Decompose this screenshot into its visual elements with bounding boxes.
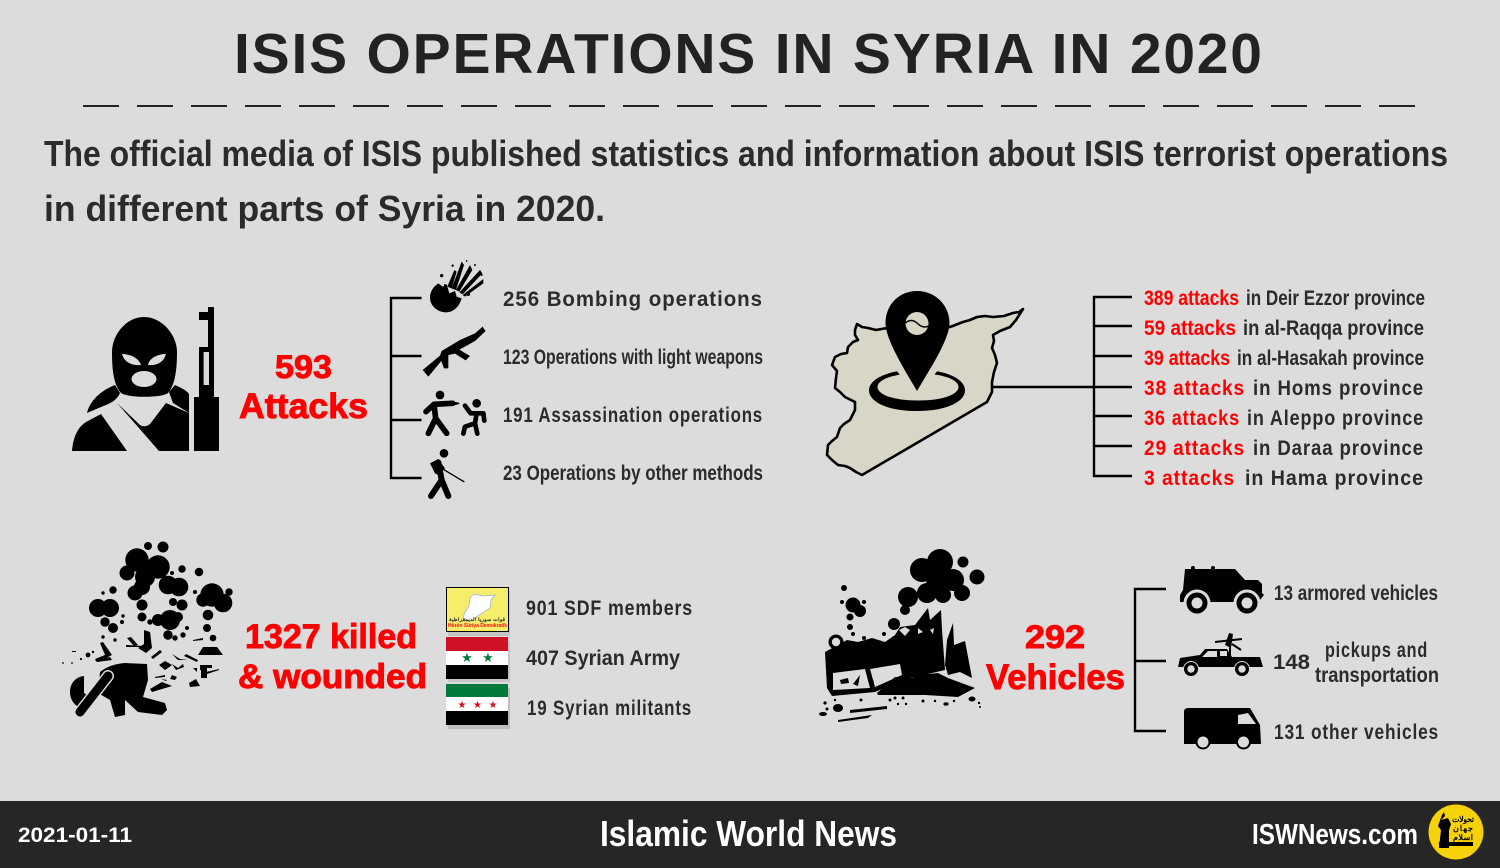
flag: SDF	[446, 588, 510, 636]
flag: Syrian opposition: ★	[473, 700, 482, 711]
logo: اسلام	[1453, 833, 1473, 843]
province list: 36 attacks	[1144, 407, 1240, 430]
province list: 39 attacks	[1144, 347, 1230, 370]
casualty total	[238, 618, 427, 696]
province list: 3 attacks	[1144, 467, 1235, 490]
province list: 59 attacks	[1144, 317, 1236, 340]
date: 2021-01-11	[18, 824, 132, 847]
panel: vehicles	[819, 549, 1439, 750]
flag: Syrian opposition	[446, 684, 510, 729]
flag: Syrian Arab Republic: ★	[461, 651, 473, 666]
flag: Syrian Arab Republic: ★	[482, 651, 494, 666]
icon: person hit by blast	[62, 542, 233, 717]
icon: assault rifle	[423, 327, 486, 377]
province list: in al-Hasakah province	[1237, 347, 1424, 370]
row text: SDF: 901 SDF members	[526, 597, 693, 620]
intro text	[44, 133, 1448, 229]
icon: burning vehicle	[819, 549, 984, 722]
province list: in Homs province	[1253, 377, 1424, 400]
vehicle total: 292	[1025, 619, 1085, 655]
icon: armed pickup	[1178, 633, 1263, 677]
attack total	[239, 349, 368, 426]
row text: pickups: pickups and	[1325, 639, 1428, 662]
province list: in Aleppo province	[1247, 407, 1424, 430]
row text: light weapons: 123 Operations with light weapons	[503, 346, 763, 369]
icon: masked fighter with rifle	[72, 307, 219, 451]
map of Syria with pin	[827, 291, 1023, 475]
province list: 29 attacks	[1144, 437, 1245, 460]
row text: pickups: transportation	[1315, 664, 1439, 687]
panel: provinces	[827, 287, 1425, 490]
icon: bomb explosion	[430, 260, 483, 312]
row text: Syrian Army: 407 Syrian Army	[526, 647, 680, 670]
row text: bombing: 256 Bombing operations	[503, 288, 763, 311]
row text: other vehicles: 131 other vehicles	[1274, 721, 1439, 744]
attack total: 593	[275, 349, 332, 385]
row text: other methods: 23 Operations by other methods	[503, 462, 763, 485]
province list: in Hama province	[1245, 467, 1424, 490]
panel: casualties	[62, 542, 693, 729]
icon: armored vehicle	[1180, 566, 1264, 616]
logo: تحولات	[1452, 815, 1475, 825]
vehicle total	[986, 619, 1125, 697]
casualty total: 1327 killed	[245, 618, 417, 656]
row text: assassination: 191 Assassination operations	[503, 404, 763, 427]
website: ISWNews.com	[1252, 819, 1418, 851]
province list: in al-Raqqa province	[1243, 317, 1424, 340]
icon: armed man	[430, 449, 464, 496]
footer title: Islamic World News	[600, 813, 897, 854]
flag: SDF: قوات سوريا الديمقراطية	[449, 617, 506, 623]
flag: Syrian Arab Republic	[446, 637, 510, 682]
row text: pickups: 148	[1273, 651, 1310, 674]
province list	[1144, 287, 1425, 490]
vehicle total: Vehicles	[986, 658, 1125, 697]
row text: militants: 19 Syrian militants	[527, 697, 692, 720]
row text: armored: 13 armored vehicles	[1274, 582, 1438, 605]
row text: pickups	[1273, 639, 1439, 687]
province list: in Daraa province	[1253, 437, 1424, 460]
province list: 389 attacks	[1144, 287, 1239, 310]
title: ISIS OPERATIONS IN SYRIA IN 2020	[234, 22, 1262, 86]
footer	[0, 801, 1500, 868]
casualty total: & wounded	[238, 658, 427, 696]
logo: جهان	[1453, 824, 1473, 834]
logo	[1428, 804, 1484, 860]
icon: gunman and victim	[426, 391, 484, 434]
icon: van	[1184, 708, 1261, 750]
province list: 38 attacks	[1144, 377, 1245, 400]
flag: Syrian opposition: ★	[489, 700, 498, 711]
panel: attacks	[72, 260, 763, 496]
flag: SDF: Hêzên Sûriya Demokratîk	[448, 623, 507, 629]
province list: in Deir Ezzor province	[1246, 287, 1425, 310]
intro text: in different parts of Syria in 2020.	[44, 188, 605, 229]
flag: Syrian opposition: ★	[458, 700, 467, 711]
attack total: Attacks	[239, 387, 368, 426]
